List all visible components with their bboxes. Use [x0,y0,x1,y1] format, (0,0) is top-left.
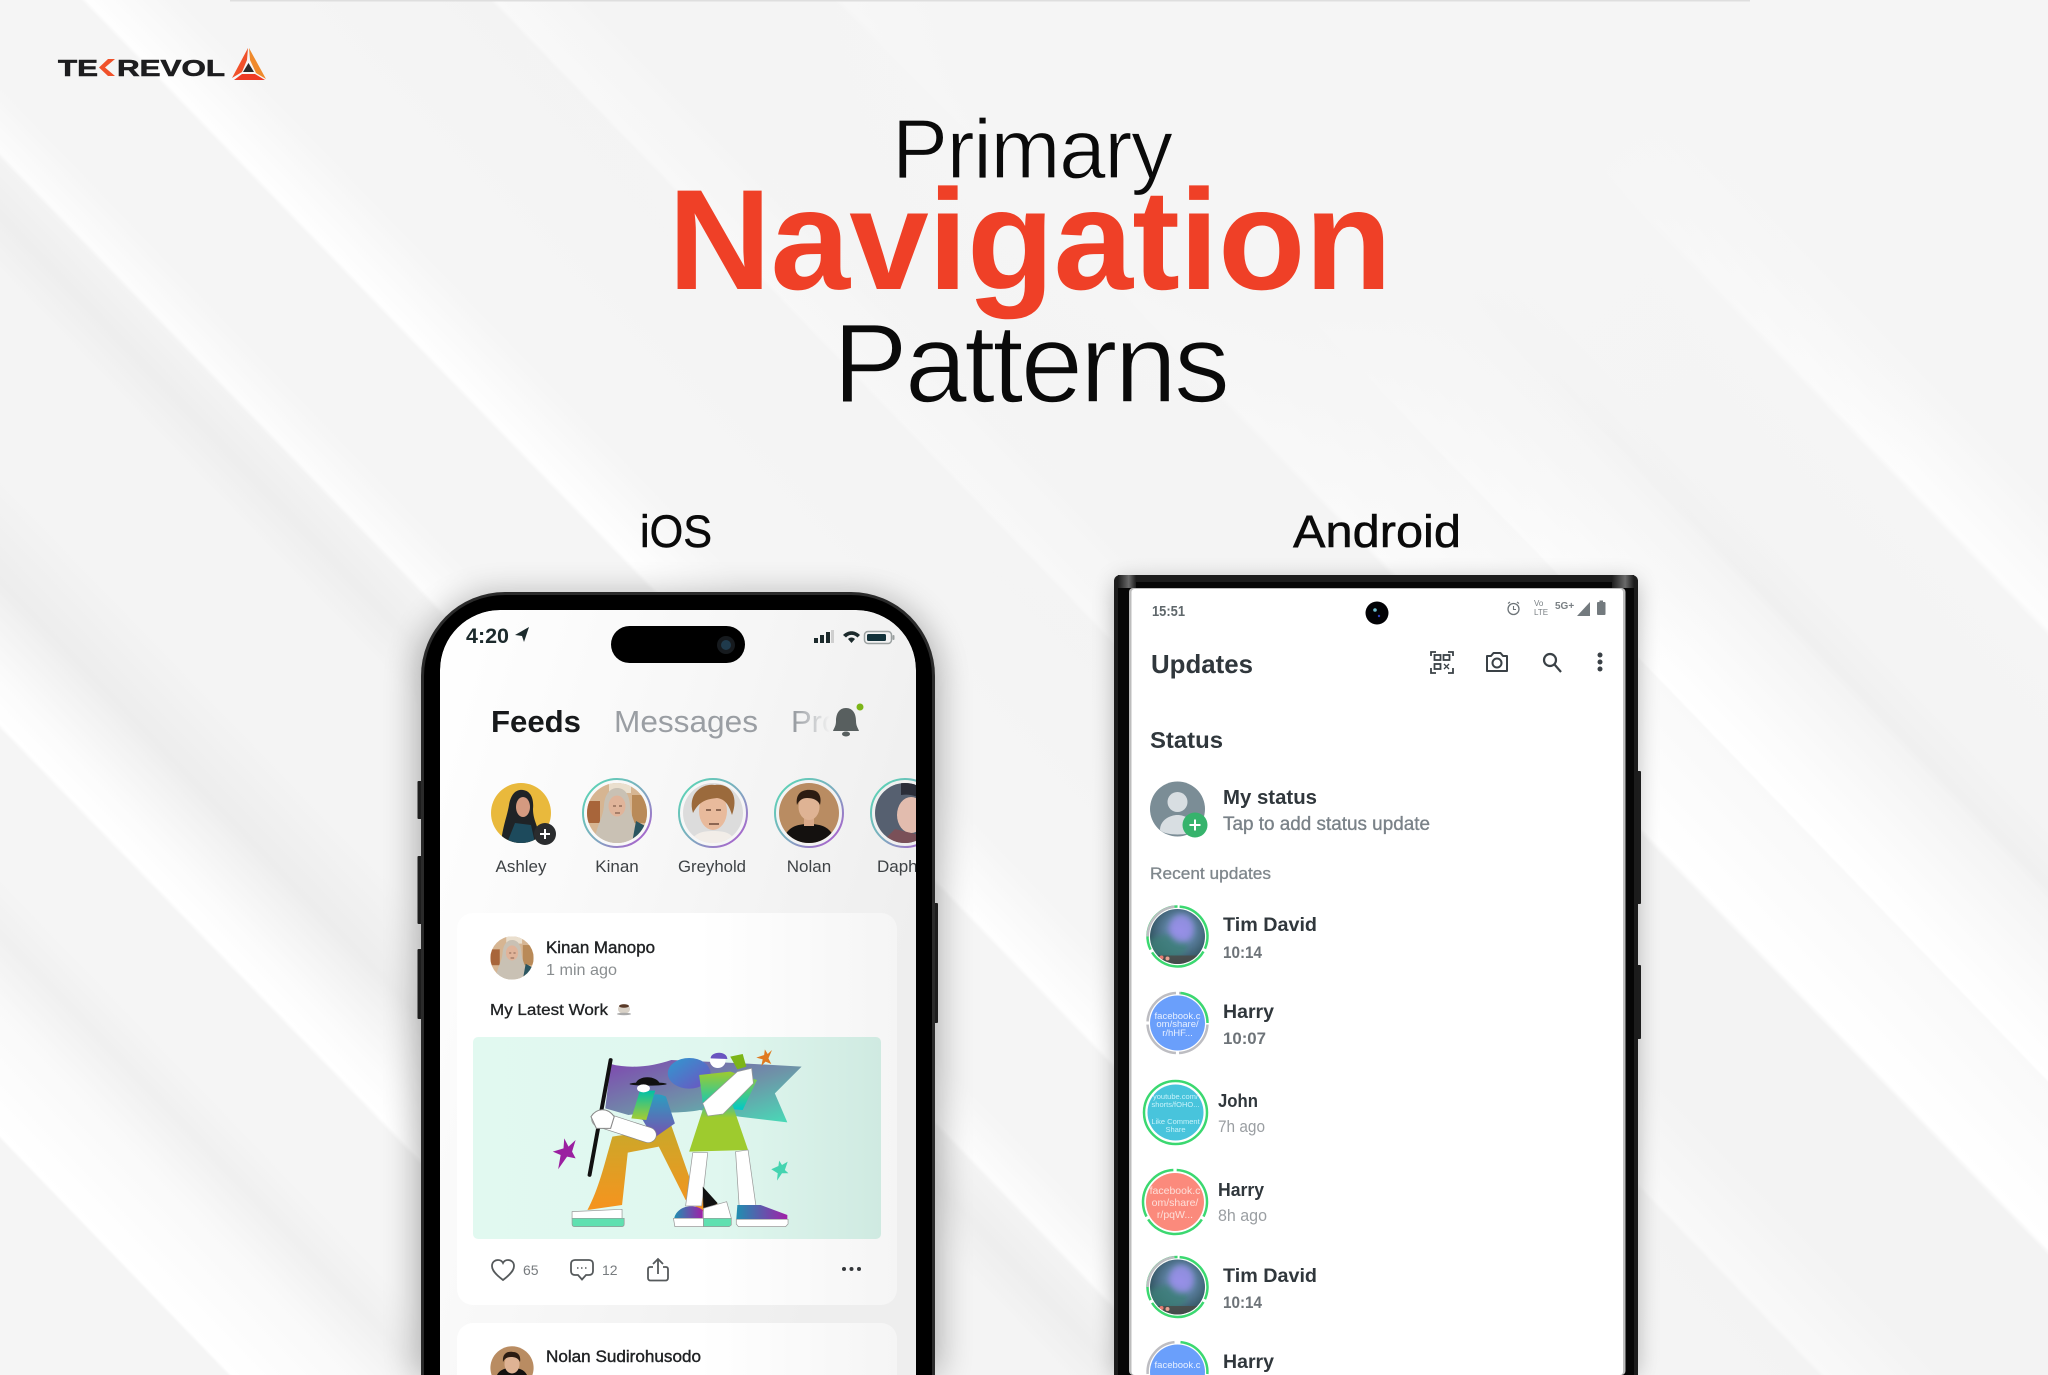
update row: John [1144,1081,1265,1144]
my status text: My status [1223,787,1317,809]
logo: TekRevol: TE [58,55,98,81]
tabs: Feeds Messages Profile: Pro [791,704,839,739]
icon: search [1544,654,1561,672]
update row: Tim David: 10:14 [1223,944,1263,962]
update row: Harry 10:07: r/hHF... [1162,1028,1193,1039]
phone body [1114,575,1638,1375]
story: Ashley [491,783,556,876]
side buttons [418,781,938,1023]
title: Primary Navigation Patterns: Navigation [668,161,1392,320]
like count: 65 [523,1262,539,1278]
story: Greyhold [678,779,747,876]
title: Primary Navigation Patterns [668,102,1392,426]
panel: iOS phone [417,592,939,1375]
story: Nolan [775,779,843,876]
phone body [421,592,935,1375]
status bar: 4:20 [466,625,509,648]
tabs: Feeds Messages Profile: Feeds [491,704,581,739]
update row: Harry partial [1148,1342,1274,1375]
update row: John: Share [1165,1125,1186,1134]
comment count: 12 [602,1262,618,1278]
icon: QR scanner [1431,652,1453,673]
right figure [668,1058,711,1089]
story: Kinan [583,779,651,876]
panel: Android phone [1114,575,1641,1375]
story: Daphne: Daphne [877,857,937,876]
front camera [1366,602,1388,624]
update row: Harry 8h ago: 8h ago [1218,1206,1267,1225]
tabs: Feeds Messages Profile: Messages [614,704,758,739]
icon: notification bell [833,704,864,736]
icon: share [648,1259,668,1280]
update row: Harry partial: Harry [1223,1351,1274,1373]
update row: Harry 10:07: 10:07 [1223,1030,1266,1048]
avatar: Kinan Manopo [490,936,534,980]
story: Nolan: Nolan [787,857,831,876]
update row: John: youtube.com/ [1153,1092,1199,1101]
update row: Tim David [1145,904,1317,969]
update row: Harry 10:07: om/share/ [1156,1019,1199,1030]
my status row [1150,782,1430,838]
screen [1129,588,1626,1375]
heading: iOS: iOS [640,506,712,557]
heading: Android: Android [1293,506,1461,557]
update row: Harry partial: facebook.c [1155,1360,1201,1371]
update row: Harry 8h ago: r/pqW... [1157,1209,1193,1221]
logo: TekRevol: REVOL [117,55,225,81]
icon: coffee cup [617,1004,631,1015]
update row: Tim David 2: Tim David [1223,1265,1317,1287]
title: Primary Navigation Patterns: Primary [892,102,1173,196]
section heading: Recent updates: Recent updates [1150,864,1271,883]
section heading: Status: Status [1150,727,1223,753]
icon: comment bubble [571,1260,593,1280]
icon: like heart [492,1260,514,1280]
story: Ashley: Ashley [495,857,547,876]
update row: John: 7h ago [1218,1117,1265,1136]
status bar [1152,599,1606,620]
update row: John: shorts/fOHO... [1152,1100,1199,1109]
update row: Harry 10:07: Harry [1223,1001,1274,1023]
screen [440,610,939,1375]
update row: John: John [1218,1090,1258,1111]
story: Greyhold: Greyhold [678,857,746,876]
my status hint: Tap to add status update [1223,814,1430,835]
second post author: Nolan Sudirohusodo [546,1347,701,1366]
left figure [587,1126,718,1212]
status bar [466,627,894,644]
update row: Tim David 2 [1145,1255,1317,1319]
update row: John: Like Comment [1151,1117,1201,1126]
post caption: My Latest Work [490,1002,609,1019]
side buttons [1636,771,1641,1039]
post time: 1 min ago [546,962,617,979]
update row: Harry 8h ago: om/share/ [1152,1197,1198,1209]
icon: overflow menu [1598,652,1602,672]
update row: Tim David 2: 10:14 [1223,1294,1263,1312]
panel: post card [457,913,897,1305]
status bar: 15:51 [1152,603,1185,620]
logo: TekRevol [58,48,266,81]
illustration: two figures with a flag [473,1037,881,1239]
dynamic island [611,626,745,663]
update row: Harry 10:07 [1146,991,1274,1055]
avatar: my status [1150,782,1208,838]
icon: more dots [842,1267,861,1271]
status bar: 5G+ [1555,601,1574,612]
status bar: Vo [1534,599,1544,608]
status bar: LTE [1534,608,1548,617]
title: Primary Navigation Patterns: Patterns [833,301,1230,426]
post author: Kinan Manopo [546,938,655,957]
story: Daphne [870,778,916,876]
panel: second post card [490,1323,876,1375]
avatar: Nolan Sudirohusodo [490,1346,534,1375]
update row: Tim David: Tim David [1223,914,1317,936]
header: Updates: Updates [1151,649,1253,679]
icon: camera [1487,653,1507,671]
stories row [491,779,939,876]
update row: Harry 8h ago: facebook.c [1150,1185,1200,1197]
tabs: Feeds Messages Profile [493,710,826,738]
update row: Harry 8h ago: Harry [1218,1179,1265,1200]
update row: Harry 10:07: facebook.c [1155,1011,1201,1022]
story: Kinan: Kinan [595,857,639,876]
update row: Harry 8h ago [1141,1168,1267,1236]
